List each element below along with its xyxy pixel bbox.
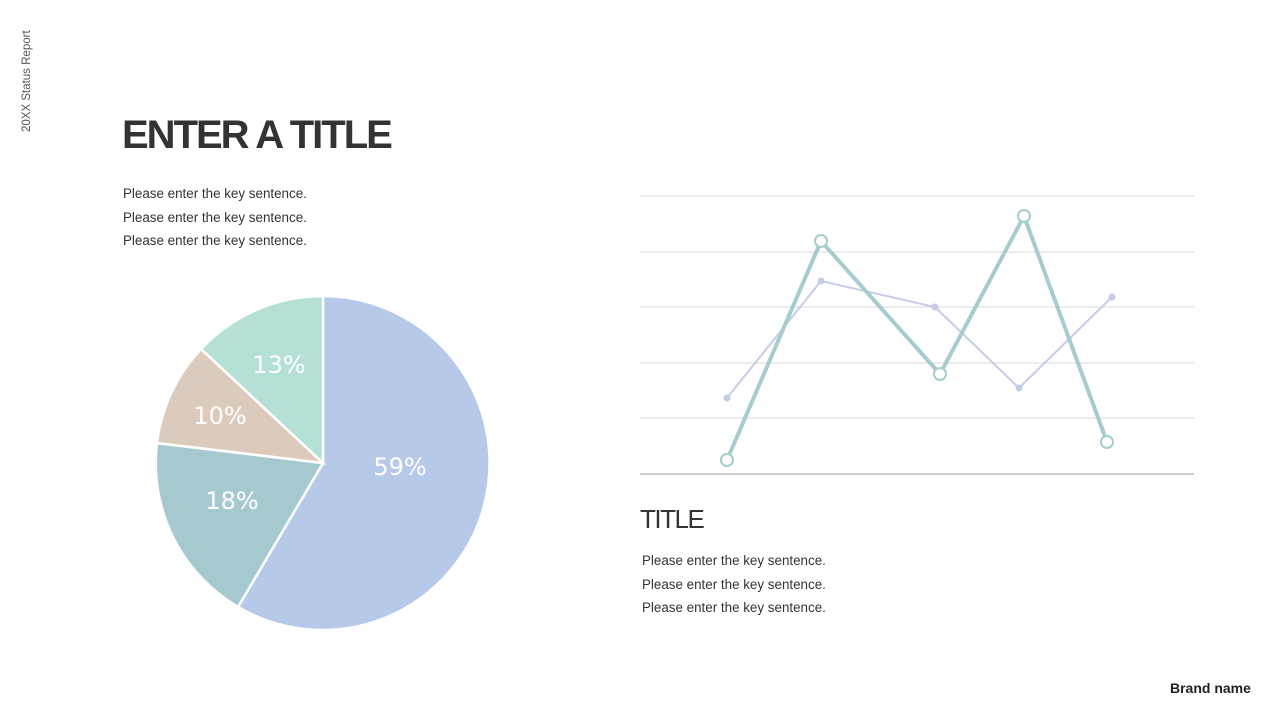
text block: chart description <box>642 553 826 615</box>
pie chart: 59% <box>373 453 427 481</box>
text block: key sentences: Please enter the key sentence. <box>123 233 307 248</box>
side label: 20XX Status Report <box>21 30 33 132</box>
pie chart: 18% <box>205 487 259 515</box>
text block: key sentences: Please enter the key sentence. <box>123 186 307 201</box>
pie chart: 10% <box>193 402 247 430</box>
text block: key sentences: Please enter the key sentence. <box>123 210 307 224</box>
pie chart <box>157 297 488 629</box>
text block: chart description: Please enter the key sentence. <box>642 576 826 592</box>
text block: chart description: Please enter the key sentence. <box>642 600 826 615</box>
brand name: Brand name <box>1170 680 1251 696</box>
subtitle: TITLE <box>640 504 703 534</box>
text block: chart description: Please enter the key sentence. <box>642 553 826 568</box>
pie chart: 13% <box>252 351 306 379</box>
text block: key sentences <box>123 186 307 248</box>
title: ENTER A TITLE <box>122 113 391 157</box>
